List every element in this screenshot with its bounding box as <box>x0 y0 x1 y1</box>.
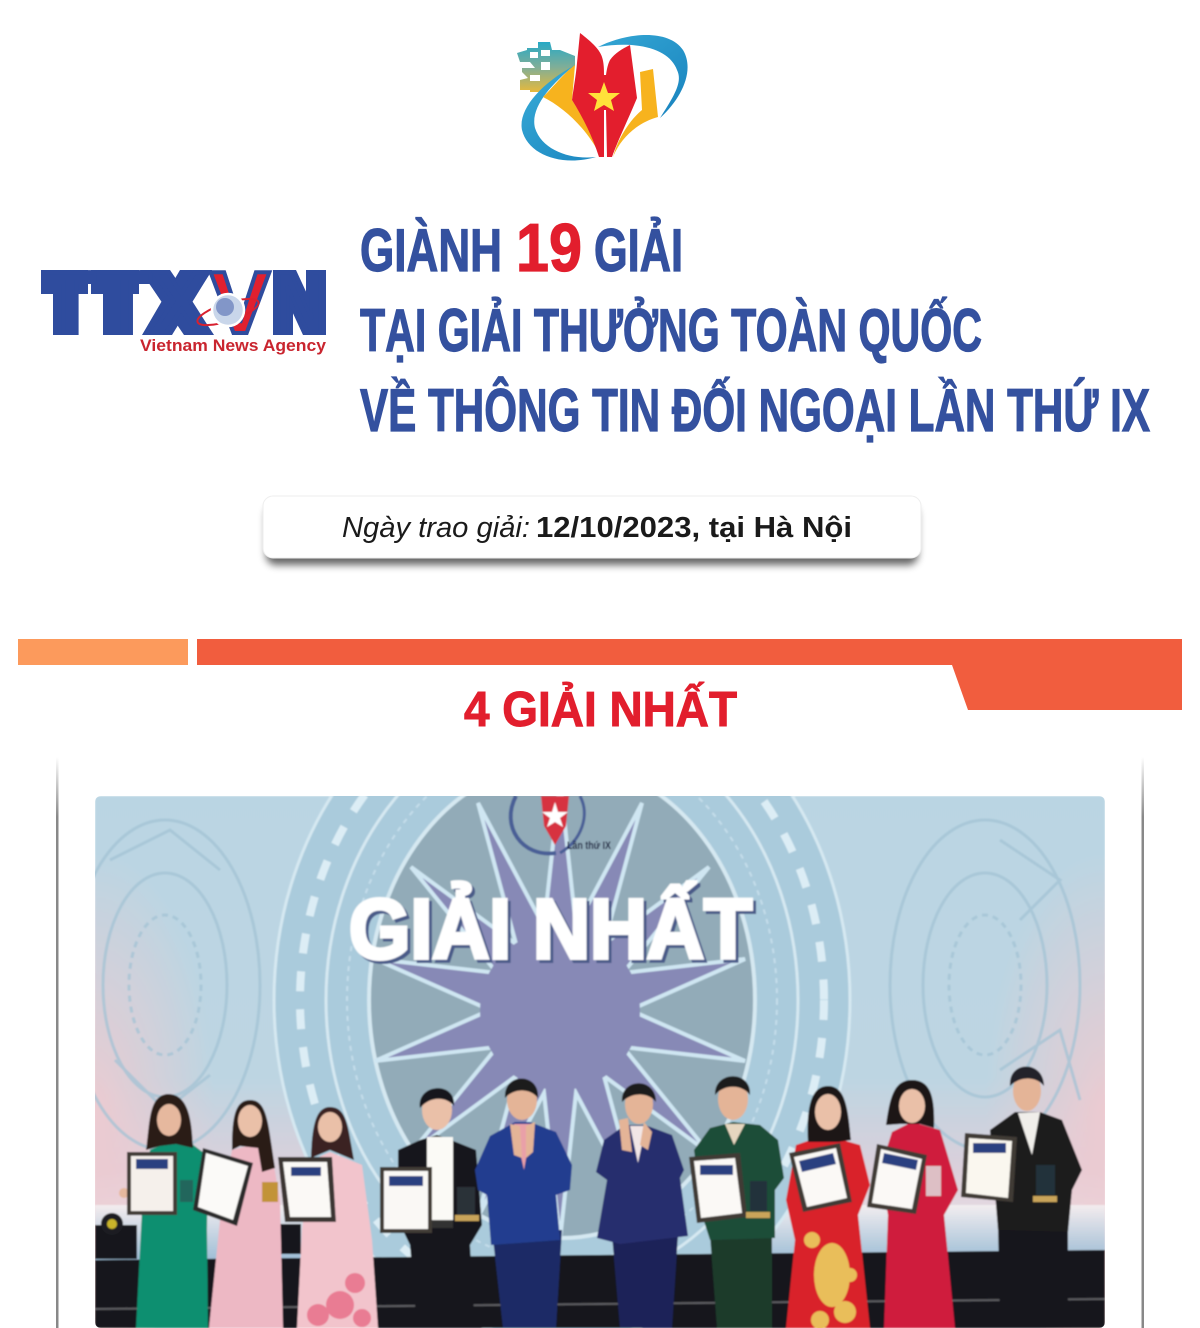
title line 1: GIẢI <box>594 217 683 284</box>
bronze drum motif <box>272 796 852 1328</box>
screen emblem <box>511 796 612 854</box>
person 5: leader in blue suit <box>475 1078 572 1328</box>
photo: award ceremony <box>95 796 1105 1328</box>
date callout: 12/10/2023, tại Hà Nội <box>536 512 852 544</box>
N letter: N <box>274 253 325 352</box>
title line 1 <box>360 210 683 286</box>
title <box>360 210 1150 444</box>
stage lights <box>95 1213 301 1259</box>
red V: V <box>210 253 270 352</box>
section heading: 4 GIẢI NHẤT <box>464 682 737 737</box>
person 8: red ao dai with gold dragon <box>786 1086 870 1328</box>
emblem blue swoosh <box>522 35 688 161</box>
person 1: green ao dai <box>119 1094 208 1328</box>
stage screen background <box>95 796 1105 1328</box>
person 10: man in dark suit <box>961 1066 1082 1328</box>
person 2: pink ao dai <box>193 1100 283 1328</box>
card frame <box>56 757 1144 1328</box>
person 6: leader in navy suit <box>596 1083 688 1328</box>
person 3: floral ao dai <box>278 1107 378 1328</box>
globe with orbit <box>195 294 261 330</box>
emblem pixel squares <box>517 42 575 92</box>
title line 1: GIÀNH <box>360 217 502 284</box>
emblem red book <box>572 33 637 157</box>
person 7: soldier <box>689 1076 784 1328</box>
letter weight blocks <box>41 270 326 335</box>
TTX letters: TTX <box>43 253 211 352</box>
person 4: man in black suit <box>380 1088 482 1328</box>
date callout <box>263 496 921 565</box>
screen text: GIẢI NHẤT <box>352 885 755 979</box>
screen text: GIẢI NHẤT <box>349 882 752 976</box>
emblem star <box>588 82 620 111</box>
title line 1: 19 <box>516 210 582 286</box>
tagline: Vietnam News Agency <box>140 336 327 355</box>
date callout: Ngày trao giải: <box>342 512 530 544</box>
section banner <box>18 639 1182 710</box>
person 9: crimson ao dai <box>867 1080 958 1328</box>
emblem gold pages <box>543 65 658 157</box>
logo: national external information award emblem <box>517 33 688 161</box>
logo: TTXVN Vietnam News Agency <box>41 253 327 355</box>
stage floor <box>95 1250 1105 1328</box>
screen emblem: Lần thứ IX <box>567 840 612 852</box>
